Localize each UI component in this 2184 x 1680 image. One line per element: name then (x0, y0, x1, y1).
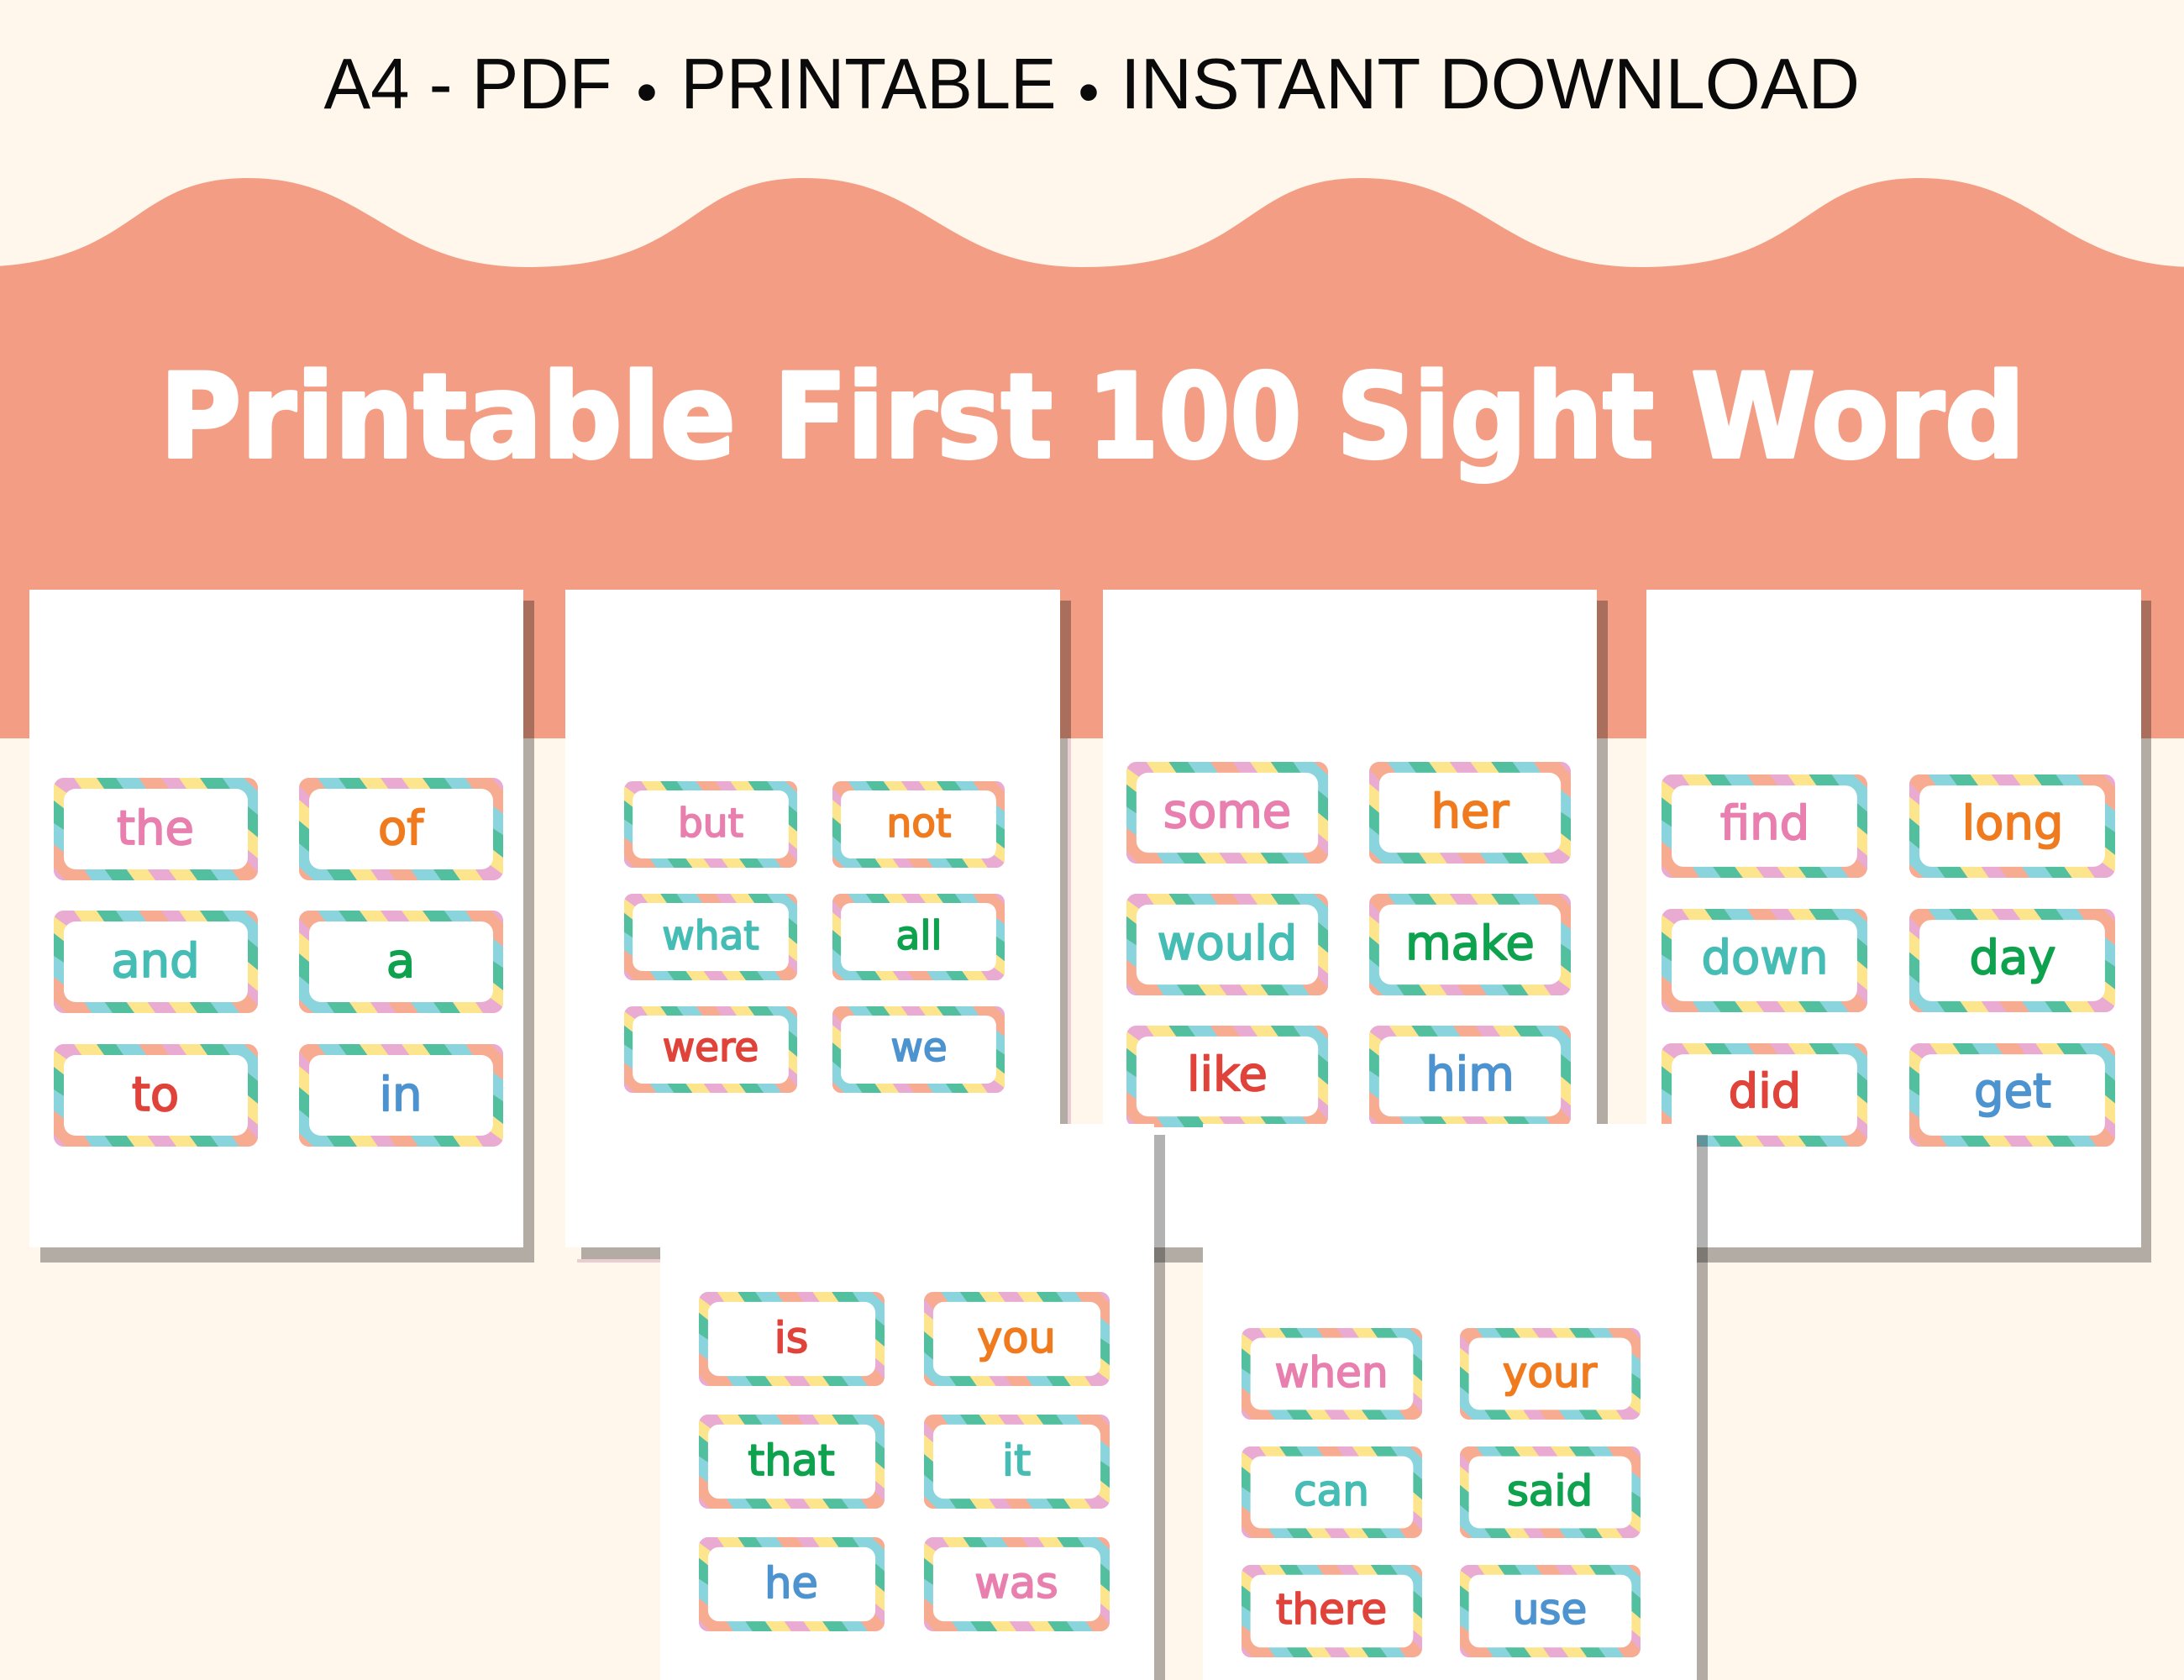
card: said (1460, 1446, 1641, 1538)
card: the: the (117, 801, 194, 856)
card: he: he (764, 1559, 818, 1609)
header line: PRINTABLE (680, 45, 1057, 124)
card: you (924, 1292, 1110, 1386)
card: would (1126, 894, 1328, 995)
card: to: to (132, 1068, 179, 1122)
card: like (1126, 1026, 1328, 1127)
header line: A4 - PDF (324, 45, 612, 124)
card: can: can (1294, 1467, 1369, 1515)
card: were: were (663, 1025, 759, 1071)
card: we: we (890, 1025, 948, 1071)
card: said: said (1507, 1467, 1593, 1515)
card: all (832, 894, 1005, 980)
card: did (1662, 1043, 1867, 1147)
card: her: her (1431, 785, 1509, 839)
card: get: get (1974, 1064, 2051, 1119)
card: would: would (1158, 916, 1297, 971)
card: and: and (111, 934, 200, 989)
panel: sheet 6 (1203, 1124, 1708, 1680)
card: there: there (1276, 1585, 1387, 1634)
title: Printable (160, 349, 736, 485)
card: day (1909, 909, 2115, 1012)
title: 100 (1087, 349, 1302, 485)
card: use (1460, 1565, 1641, 1657)
card: did: did (1729, 1064, 1801, 1119)
card: not: not (887, 801, 951, 847)
card: it (924, 1415, 1110, 1509)
panel: sheet 5 (660, 1124, 1165, 1680)
card: a: a (386, 934, 415, 989)
card: some: some (1163, 785, 1291, 839)
card: make (1369, 894, 1571, 995)
card: there (1242, 1565, 1422, 1657)
card: in (299, 1044, 503, 1147)
title: Sight (1336, 349, 1654, 485)
card: long (1909, 774, 2115, 878)
card: can (1242, 1446, 1422, 1538)
header line: • (1078, 59, 1100, 126)
card: a (299, 911, 503, 1013)
card: down (1662, 909, 1867, 1012)
card: in: in (379, 1068, 423, 1122)
card: what (624, 894, 797, 980)
title: Word (1691, 349, 2025, 485)
header line: • (636, 59, 658, 126)
card: some (1126, 762, 1328, 864)
card: to (54, 1044, 258, 1147)
title (160, 349, 2025, 485)
card: your: your (1503, 1348, 1598, 1397)
card: long: long (1962, 796, 2063, 851)
card: you: you (977, 1314, 1056, 1363)
card: it: it (1002, 1436, 1031, 1486)
card: was (924, 1537, 1110, 1631)
panel: sheet 3 (1103, 590, 1608, 1263)
card: make: make (1405, 916, 1535, 971)
card: of (299, 778, 503, 880)
card: not (832, 781, 1005, 868)
card: that (699, 1415, 885, 1509)
card: him: him (1425, 1047, 1515, 1102)
panel: sheet 1 (29, 590, 534, 1263)
panel: sheet 4 (1646, 590, 2151, 1263)
card: day: day (1969, 931, 2056, 985)
title: First (774, 349, 1053, 485)
card: when: when (1274, 1348, 1389, 1397)
card: find (1662, 774, 1867, 878)
card: use: use (1513, 1585, 1587, 1634)
card: all: all (896, 913, 942, 959)
panel: sheet 2 (565, 590, 1071, 1263)
card: of: of (378, 801, 424, 856)
salmon wave banner (0, 178, 2184, 738)
card: your (1460, 1328, 1641, 1420)
card: is: is (774, 1314, 808, 1363)
card: we (832, 1006, 1005, 1093)
header line: INSTANT DOWNLOAD (1121, 45, 1860, 124)
card: that: that (748, 1436, 835, 1486)
card: were (624, 1006, 797, 1093)
card: when (1242, 1328, 1422, 1420)
card: get (1909, 1043, 2115, 1147)
card: him (1369, 1026, 1571, 1127)
card: what: what (662, 913, 759, 959)
card: like: like (1187, 1047, 1268, 1102)
card: and (54, 911, 258, 1013)
card: was: was (974, 1559, 1058, 1609)
card: her (1369, 762, 1571, 864)
card: find: find (1720, 796, 1809, 851)
header line (324, 45, 1860, 126)
card: but: but (678, 801, 743, 847)
card: but (624, 781, 797, 868)
card: the (54, 778, 258, 880)
card: down: down (1701, 931, 1829, 985)
card: he (699, 1537, 885, 1631)
card: is (699, 1292, 885, 1386)
